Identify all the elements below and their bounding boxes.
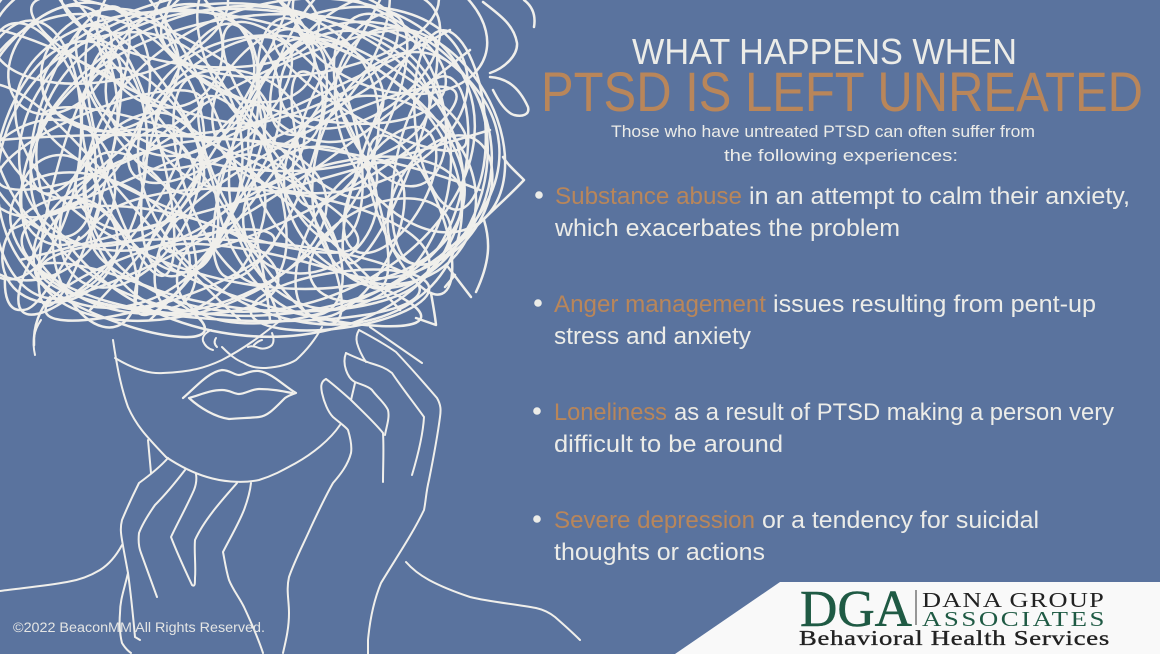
bullet: anger management: stress and anxiety bbox=[554, 323, 751, 350]
bullet: anger management bbox=[534, 291, 1096, 350]
bullet: substance abuse bbox=[535, 183, 1130, 242]
bullet: loneliness bbox=[533, 399, 1114, 458]
logo: Associates: ASSOCIATES bbox=[922, 607, 1107, 631]
lips bbox=[183, 370, 296, 419]
bullet: anger management: issues resulting from pent-up bbox=[773, 291, 1096, 318]
illustration: woman with tangled scribble hair bbox=[0, 0, 580, 654]
face outline and neck bbox=[34, 320, 340, 482]
hand on cheek bbox=[120, 327, 441, 654]
shoulders bbox=[0, 545, 580, 640]
intro text: Those who have untreated PTSD can often suffer from bbox=[611, 122, 1035, 141]
bullet: loneliness: Loneliness bbox=[554, 399, 667, 426]
scribble hair bbox=[0, 0, 540, 382]
logo: Behavioral Health Services: Behavioral Health Services bbox=[799, 626, 1110, 650]
bullet: loneliness: difficult to be around bbox=[554, 431, 783, 458]
intro text bbox=[611, 122, 1035, 165]
bullet: severe depression: Severe depression bbox=[554, 507, 755, 534]
logo: Dana Group: DANA GROUP bbox=[922, 588, 1105, 612]
copyright: ©2022 BeaconMM All Rights Reserved. bbox=[13, 620, 265, 635]
bullet: severe depression bbox=[533, 507, 1039, 566]
bullet: substance abuse: in an attempt to calm their anxiety, bbox=[749, 183, 1130, 210]
bullet: loneliness: as a result of PTSD making a person very bbox=[674, 399, 1114, 426]
bullet: substance abuse: Substance abuse bbox=[555, 183, 742, 210]
logo panel bbox=[675, 581, 1160, 654]
bullet: severe depression: thoughts or actions bbox=[554, 539, 765, 566]
title bbox=[541, 31, 1143, 123]
logo: DGA monogram: DGA bbox=[800, 581, 912, 638]
bullet: substance abuse: which exacerbates the problem bbox=[554, 215, 900, 242]
title line 1: WHAT HAPPENS WHEN bbox=[632, 31, 1017, 72]
bullet: anger management: Anger management bbox=[554, 291, 766, 318]
intro text: the following experiences: bbox=[724, 146, 958, 165]
bullet: severe depression: or a tendency for suicidal bbox=[762, 507, 1039, 534]
